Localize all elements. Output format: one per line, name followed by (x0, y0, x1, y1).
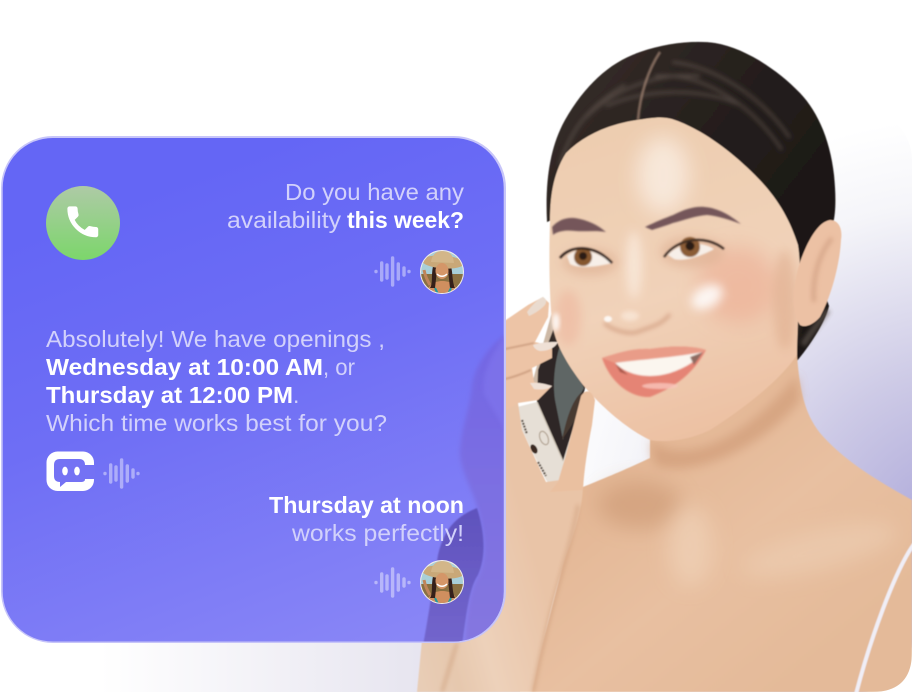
icon: sound wave 3 (376, 569, 409, 596)
assistant message: Thursday at 12:00 PM (46, 382, 293, 408)
right eye (664, 237, 724, 260)
woman on the phone (417, 42, 912, 692)
tinted hand seen through card (423, 335, 505, 645)
background gradient panel (100, 110, 912, 692)
caller message 2: works perfectly! (291, 520, 464, 546)
left eye (560, 248, 612, 267)
caller message 1: this week? (347, 207, 464, 233)
avatar: caller 1 (420, 250, 464, 294)
avatar: caller 2 (420, 560, 464, 604)
caller message 1: Do you have any (285, 179, 465, 205)
caller message 2: Thursday at noon (269, 492, 464, 518)
fingers and nails (506, 296, 558, 404)
assistant message (46, 326, 387, 436)
icon: green phone call button (46, 186, 120, 260)
dress strap (856, 544, 912, 692)
left brow (552, 218, 606, 235)
assistant message: Wednesday at 10:00 AM (46, 354, 323, 380)
neck and torso (530, 355, 912, 692)
icon: sound wave 1 (376, 258, 409, 285)
thumb (558, 390, 596, 488)
icon: assistant bot logo (46, 452, 95, 491)
caller message 2 (269, 492, 464, 546)
smartphone (517, 312, 590, 484)
nose (604, 311, 670, 333)
hair (547, 42, 835, 361)
icon: sound wave 2 (105, 460, 138, 487)
panel: chat card (1, 136, 506, 645)
ear (794, 220, 841, 326)
assistant message: Which time works best for you? (46, 410, 387, 436)
lips and smile (602, 346, 706, 397)
caller message 1: availability (227, 207, 342, 233)
palm and forearm (417, 400, 583, 692)
assistant message: . (293, 382, 299, 408)
assistant message: Absolutely! We have openings , (46, 326, 385, 352)
arm seam shadows (442, 505, 578, 692)
caller message 1 (227, 179, 465, 233)
right brow (645, 207, 741, 230)
face (549, 117, 800, 441)
assistant message: , or (323, 354, 355, 380)
